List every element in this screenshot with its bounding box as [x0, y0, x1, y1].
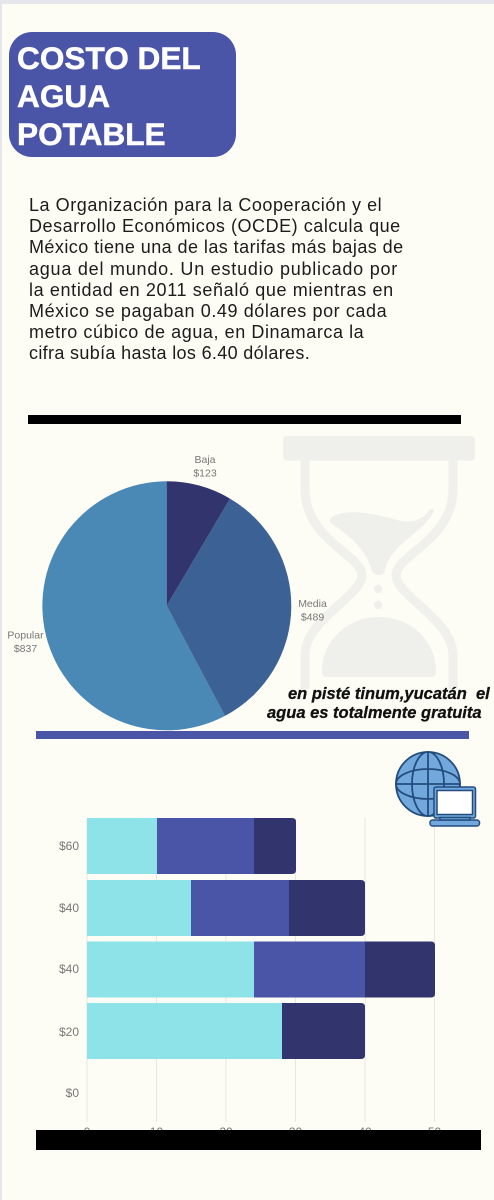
label: Baja: $123 [193, 468, 217, 480]
y axis labels: $0 [66, 1086, 79, 1100]
title: AGUA [17, 78, 110, 114]
label: Media: $489 [301, 612, 324, 624]
pie chart [7, 454, 327, 730]
icon: hourglass watermark [283, 436, 475, 689]
icon: globe and laptop [395, 751, 480, 827]
text block: introduction: metro cúbico de agua, en Dinamarca la [29, 322, 364, 342]
pie slice: Media [167, 499, 291, 716]
text block: introduction: Desarrollo Económicos (OCDE) calcula que [29, 216, 401, 236]
blue divider [36, 731, 469, 739]
label: Popular: Popular [7, 630, 44, 642]
label: Popular: $837 [14, 643, 37, 655]
x axis labels: 20 [219, 1125, 233, 1139]
label: Baja: Baja [194, 454, 216, 466]
callout: agua es totalmente gratuita [267, 704, 482, 722]
title [8, 32, 236, 156]
y axis labels: $40 [59, 962, 79, 976]
black divider top [28, 415, 461, 424]
text block: introduction: La Organización para la Cooperación y el [29, 195, 382, 215]
globe [396, 752, 460, 816]
x axis labels: 50 [428, 1125, 441, 1139]
stacked bar chart [59, 818, 441, 1139]
black footer bar [36, 1130, 480, 1150]
x axis labels: 10 [150, 1125, 163, 1139]
bar row 4 [87, 1003, 365, 1059]
pie slice: Baja [167, 481, 230, 606]
bar row 1 [87, 818, 296, 874]
x axis labels: 40 [358, 1125, 372, 1139]
x axis labels [84, 1125, 441, 1139]
text block: introduction [29, 195, 404, 363]
y axis labels: $20 [59, 1025, 79, 1039]
y axis labels: $60 [59, 839, 79, 853]
text block: introduction: México tiene una de las tarifas más bajas de [29, 237, 404, 257]
callout: en pisté tinum,yucatán el [288, 685, 490, 703]
y axis labels [59, 839, 79, 1100]
title: COSTO DEL [17, 40, 201, 76]
text block: introduction: cifra subía hasta los 6.40 dólares. [29, 343, 310, 363]
x axis labels: 0 [84, 1125, 91, 1139]
laptop [430, 787, 480, 826]
callout [266, 685, 490, 722]
title: POTABLE [17, 116, 166, 152]
text block: introduction: agua del mundo. Un estudio publicado por [29, 259, 398, 279]
text block: introduction: México se pagaban 0.49 dólares por cada [29, 301, 387, 321]
bar row 3 [87, 942, 435, 998]
bar row 2 [87, 880, 365, 936]
pie slice: Popular [42, 481, 225, 730]
x axis labels: 30 [289, 1125, 302, 1139]
label: Media: Media [298, 598, 327, 610]
text block: introduction: la entidad en 2011 señaló que mientras en [29, 280, 394, 300]
y axis labels: $40 [59, 901, 79, 915]
